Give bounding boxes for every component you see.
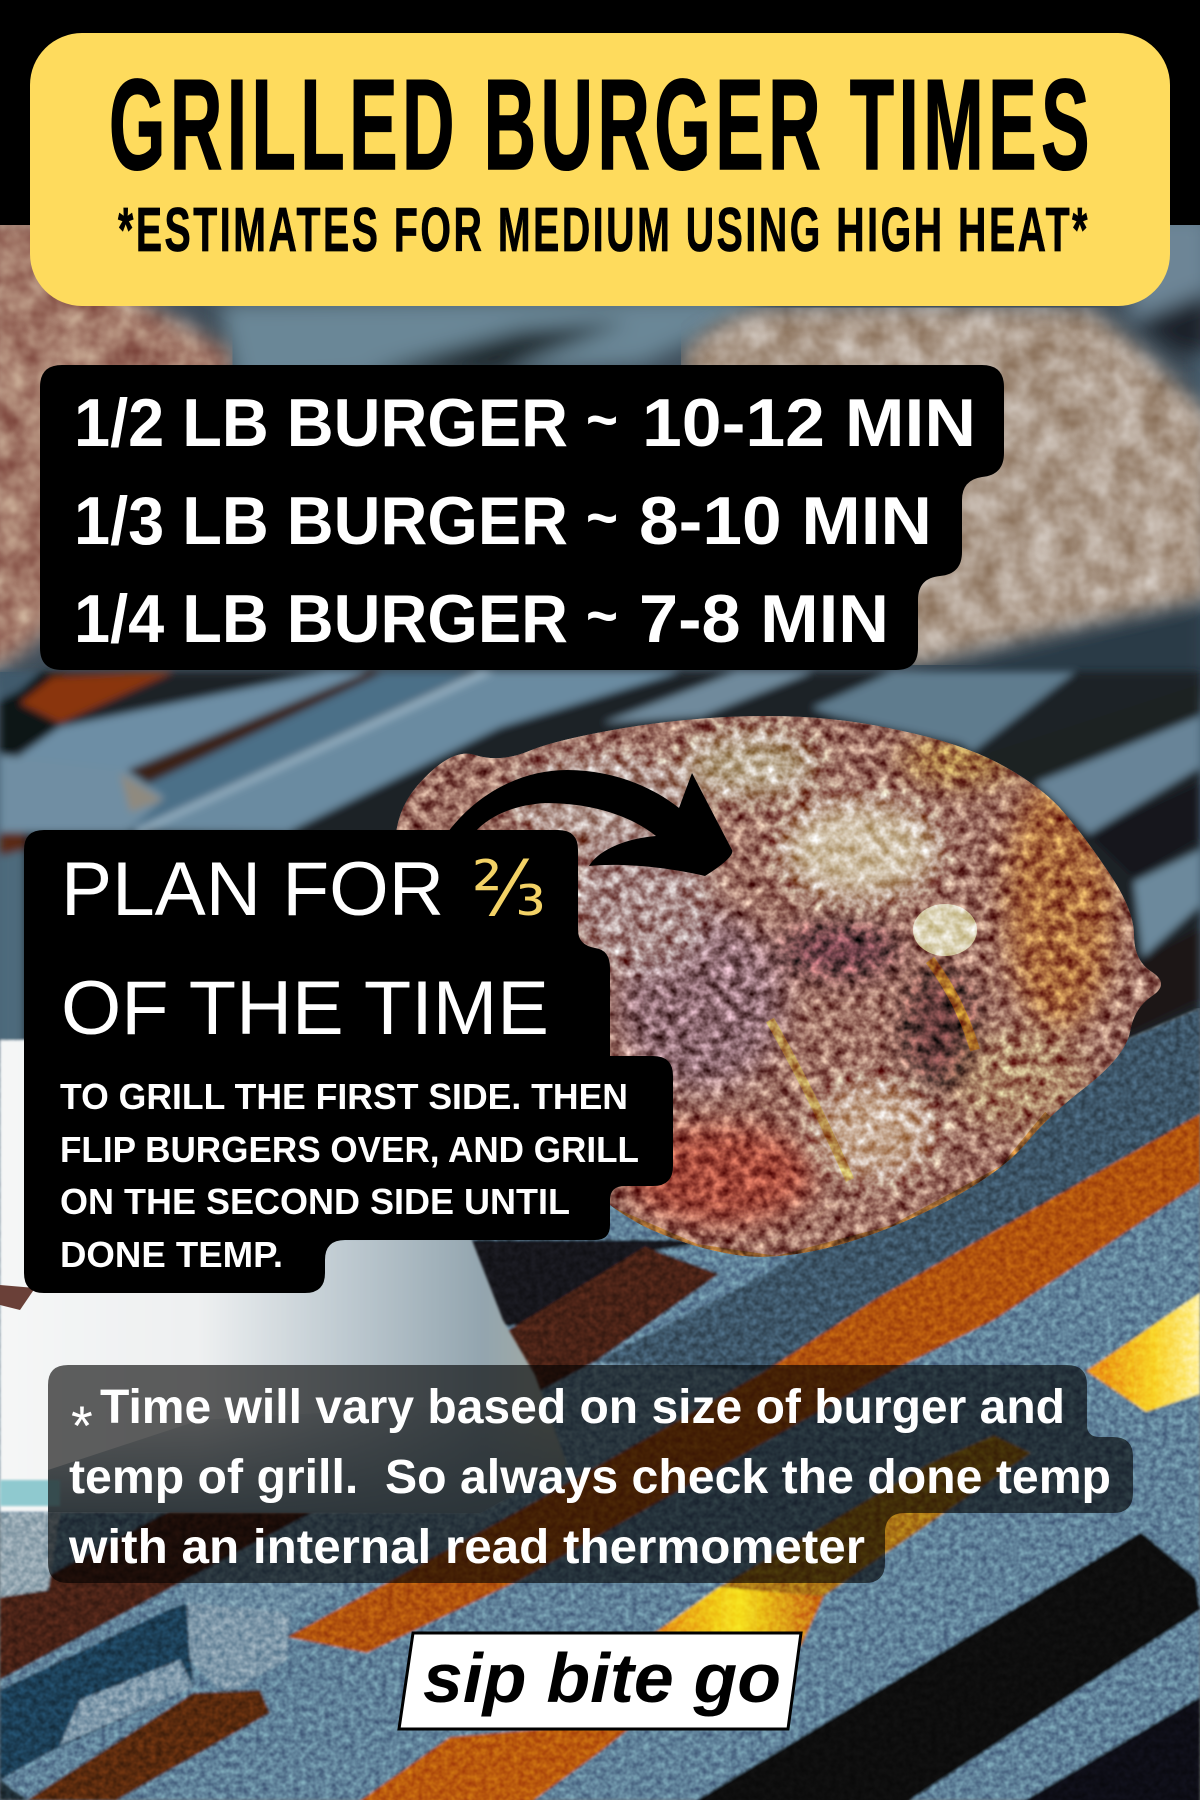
panel: burger sizes and times: 1/4 LB BURGER bbox=[74, 581, 568, 657]
panel: burger sizes and times bbox=[40, 365, 1004, 670]
main burger bbox=[396, 716, 1161, 1257]
left burger bbox=[0, 215, 232, 672]
panel: burger sizes and times: 8-10 MIN bbox=[639, 483, 932, 559]
panel: burger sizes and times: 10-12 MIN bbox=[642, 385, 976, 461]
panel: burger sizes and times: 1/2 LB BURGER bbox=[74, 385, 568, 461]
logo: sip bite go: sip bite go bbox=[423, 1639, 781, 1717]
panel: burger sizes and times: ~ bbox=[586, 386, 618, 453]
lower grate bbox=[0, 1008, 1200, 1800]
panel: plan for two thirds bbox=[24, 830, 673, 1293]
panel: plan for two thirds: OF THE TIME bbox=[61, 966, 549, 1051]
panel: plan for two thirds: ON THE SECOND SIDE UNTIL bbox=[60, 1181, 570, 1222]
far right burger bbox=[681, 308, 1200, 665]
mid grate bbox=[0, 670, 1200, 1072]
arrow pointing to burger bbox=[448, 770, 732, 876]
panel: burger sizes and times: ~ bbox=[586, 582, 618, 649]
two thirds fraction: ⅔ bbox=[472, 844, 546, 933]
panel: burger sizes and times: 1/3 LB BURGER bbox=[74, 483, 568, 559]
panel: note on time variance: * bbox=[71, 1394, 93, 1457]
panel: note on time variance bbox=[48, 1365, 1133, 1583]
spatula bbox=[0, 1040, 567, 1513]
panel: note on time variance: temp of grill. So always check the done temp bbox=[69, 1451, 1111, 1504]
panel: note on time variance: with an internal read thermometer bbox=[68, 1521, 865, 1574]
panel: plan for two thirds: PLAN FOR bbox=[61, 847, 444, 932]
panel: plan for two thirds: DONE TEMP. bbox=[60, 1234, 283, 1275]
top black band bbox=[0, 0, 1200, 225]
panel: plan for two thirds: TO GRILL THE FIRST SIDE. THEN bbox=[60, 1076, 628, 1117]
title banner bbox=[30, 33, 1170, 306]
panel: burger sizes and times: 7-8 MIN bbox=[639, 581, 889, 657]
panel: plan for two thirds: FLIP BURGERS OVER, AND GRILL bbox=[60, 1129, 639, 1170]
upper blurred grate bbox=[0, 215, 1200, 700]
panel: burger sizes and times: ~ bbox=[586, 484, 618, 551]
panel: note on time variance: Time will vary based on size of burger and bbox=[100, 1381, 1065, 1434]
